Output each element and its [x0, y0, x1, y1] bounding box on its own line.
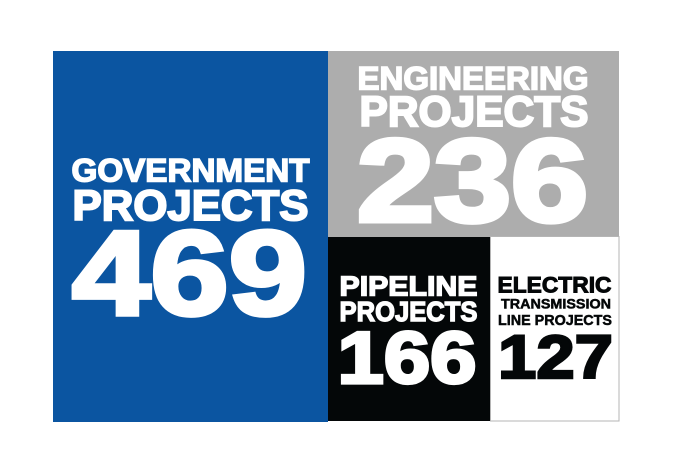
heading: pipeline: PIPELINE	[340, 270, 478, 302]
heading: projects: PROJECTS	[360, 88, 588, 136]
heading: transmission: TRANSMISSION	[501, 296, 611, 312]
number: 236: 236	[357, 115, 588, 246]
heading: electric: ELECTRIC	[498, 272, 612, 298]
panel: engineering projects	[328, 51, 619, 246]
heading: line projects: LINE PROJECTS	[498, 312, 612, 329]
number: 166: 166	[338, 318, 476, 399]
panel: pipeline projects	[328, 237, 490, 421]
panel: electric transmission line projects	[490, 236, 619, 421]
number: 127: 127	[498, 323, 613, 391]
number: 469: 469	[72, 206, 307, 340]
heading: projects: PROJECTS	[340, 296, 478, 327]
heading: government: GOVERNMENT	[72, 152, 310, 188]
heading: projects: PROJECTS	[72, 182, 308, 230]
panel: government projects	[53, 51, 328, 422]
heading: engineering: ENGINEERING	[358, 60, 588, 96]
